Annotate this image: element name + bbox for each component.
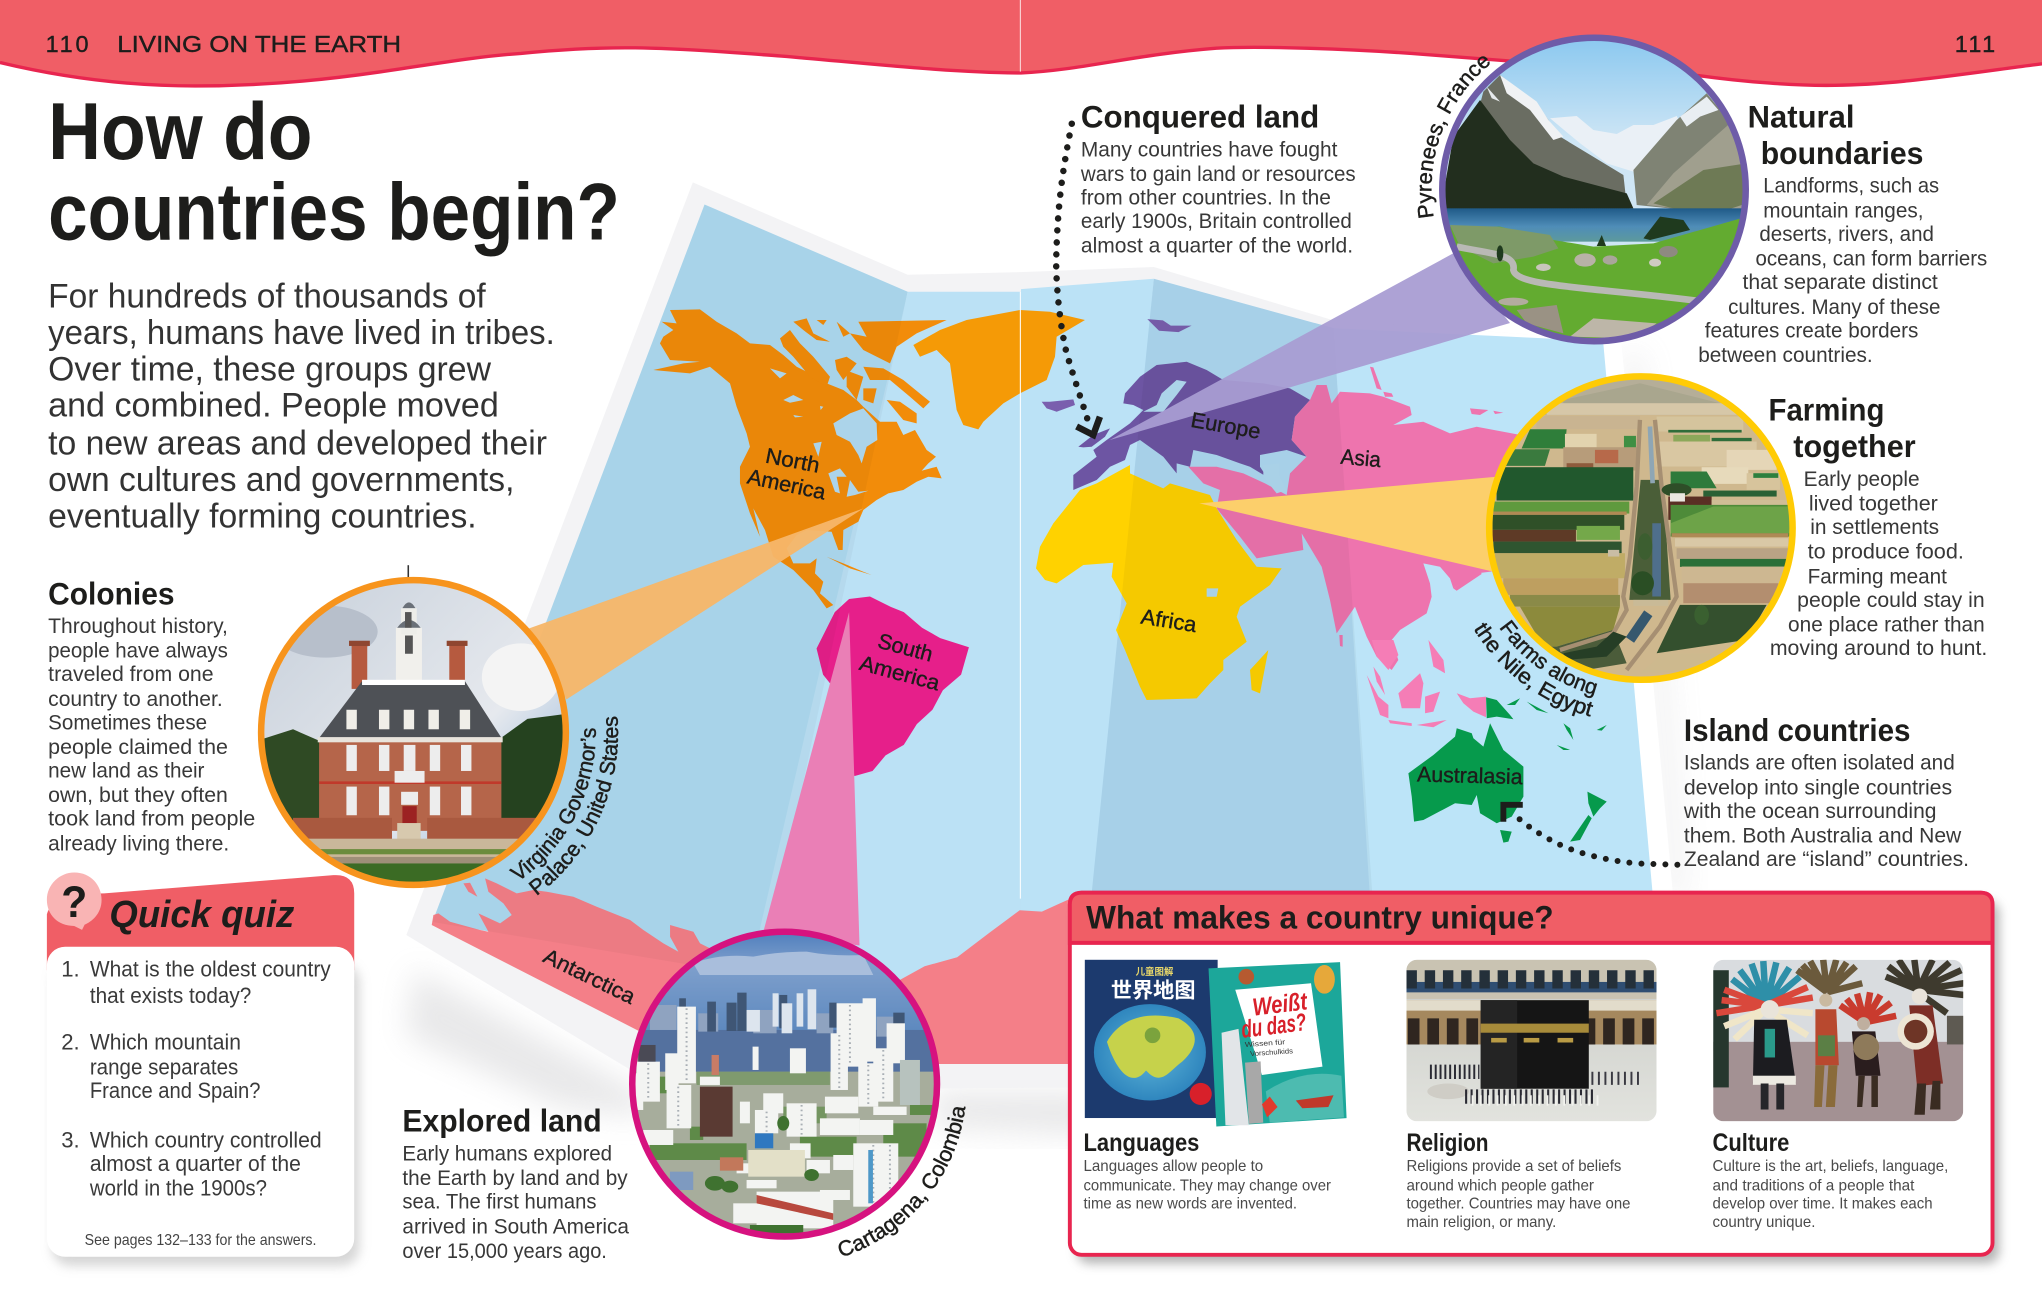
text block: colonies xyxy=(48,576,255,855)
quiz questions xyxy=(61,957,332,1201)
body: conquered land xyxy=(1080,137,1356,258)
arrow: dotted line to Australia xyxy=(1503,805,1677,865)
land texture xyxy=(650,1072,933,1160)
body: island countries: Islands are often isolated and xyxy=(1684,751,1955,775)
body: natural boundaries xyxy=(1698,174,1987,367)
body: island countries xyxy=(1683,751,1969,871)
body: religion: around which people gather xyxy=(1406,1176,1595,1194)
body: natural boundaries: Landforms, such as xyxy=(1763,174,1939,198)
photo: farms along the Nile xyxy=(1480,370,1800,690)
quiz questions: What is the oldest country xyxy=(90,957,332,982)
body: colonies: country to another. xyxy=(48,687,223,711)
Svalbard xyxy=(1147,319,1192,332)
photo ring: purple xyxy=(1442,38,1746,341)
body: colonies: new land as their xyxy=(48,758,204,782)
Baltic sea xyxy=(1143,380,1187,412)
photo ring: magenta xyxy=(632,932,937,1237)
body: farming together: people could stay in xyxy=(1797,588,1985,612)
body: natural boundaries: features create borders xyxy=(1705,318,1918,342)
label: Antarctica: Antarctica xyxy=(540,944,639,1009)
caption: Farms along the Nile: the Nile, Egypt xyxy=(1474,622,1594,717)
body: conquered land: almost a quarter of the world. xyxy=(1081,234,1353,258)
panel body xyxy=(1070,893,1993,1255)
ocean panel: middle fold xyxy=(1074,279,1373,1064)
map paper border xyxy=(406,182,1673,1089)
label: Australasia: Australasia xyxy=(1417,762,1523,789)
label: Europe: Europe xyxy=(1189,408,1262,444)
panel shadow xyxy=(1077,901,1999,1263)
quiz heading: Quick quiz xyxy=(109,894,294,936)
icon: question bubble: ? xyxy=(61,878,87,927)
tower window texture xyxy=(648,1005,890,1203)
body: island countries: develop into single countries xyxy=(1684,775,1952,799)
body: explored land: over 15,000 years ago. xyxy=(402,1239,607,1263)
label: North America: America xyxy=(745,465,828,505)
body: colonies: people have always xyxy=(48,639,228,663)
heading: farming together: together xyxy=(1793,429,1916,464)
continent: Europe xyxy=(1042,362,1310,490)
Madagascar xyxy=(1250,650,1268,693)
title: countries begin? xyxy=(48,168,620,258)
photo ring: yellow xyxy=(1489,376,1793,680)
quiz questions: Which mountain xyxy=(90,1030,241,1055)
intro paragraph: eventually forming countries. xyxy=(48,497,477,535)
text block: explored land xyxy=(402,1104,629,1263)
quiz card shadow xyxy=(52,964,359,1266)
body: island countries: with the ocean surrounding xyxy=(1683,799,1937,823)
photo: Cartagena xyxy=(629,928,940,1240)
body: colonies: took land from people xyxy=(48,807,255,831)
African great lake xyxy=(1207,588,1218,597)
body: conquered land: early 1900s, Britain controlled xyxy=(1081,209,1352,233)
label: Africa: Africa xyxy=(1139,605,1198,637)
book: world atlas: 儿童图解 xyxy=(1136,965,1174,978)
label: South America xyxy=(857,629,942,695)
body: natural boundaries: that separate distinct xyxy=(1742,270,1938,294)
header band xyxy=(0,0,2042,86)
heading: island countries: Island countries xyxy=(1684,713,1910,748)
folded world map xyxy=(406,182,1673,1089)
body: culture: and traditions of a people that xyxy=(1713,1176,1915,1194)
quiz questions: 2. xyxy=(61,1030,80,1055)
continent: Greenland xyxy=(913,310,1085,429)
label: North America xyxy=(745,444,828,505)
book: Weisst du das: Wissen für xyxy=(1245,1038,1286,1049)
body: colonies: already living there. xyxy=(48,831,229,855)
page number 110: 110 xyxy=(46,31,89,57)
heading: farming together xyxy=(1769,393,1916,464)
beam: orange to North America xyxy=(527,508,863,699)
body: island countries: Zealand are “island” countries. xyxy=(1684,847,1969,871)
heading: explored land: Explored land xyxy=(402,1104,602,1139)
body: farming together: in settlements xyxy=(1810,515,1939,539)
continent: Antarctica right xyxy=(899,899,1094,1064)
continent: Africa xyxy=(1036,465,1282,700)
caption: Farms along the Nile xyxy=(1474,578,1598,717)
body: languages: communicate. They may change over xyxy=(1084,1176,1332,1194)
icon: question bubble xyxy=(47,873,102,930)
title: How do xyxy=(48,87,313,177)
body: religion: main religion, or many. xyxy=(1406,1213,1556,1231)
beam: purple to Europe xyxy=(1110,253,1510,440)
continent: North America xyxy=(653,309,947,608)
panel: quick quiz xyxy=(47,873,359,1266)
islands of South East Asia xyxy=(1367,640,1486,727)
body: religion xyxy=(1406,1157,1630,1231)
weather vane spire xyxy=(407,565,409,612)
heading: conquered land: Conquered land xyxy=(1081,100,1319,135)
book: world atlas xyxy=(1085,960,1218,1118)
text block: natural boundaries xyxy=(1698,100,1987,367)
continent: Asia xyxy=(1188,367,1530,670)
continent: Antarctica left xyxy=(432,878,733,1047)
body: farming together: moving around to hunt. xyxy=(1770,636,1987,660)
label: Asia: Asia xyxy=(1340,445,1382,472)
text block: island countries xyxy=(1683,713,1969,871)
body: religion: together. Countries may have one xyxy=(1406,1195,1630,1213)
intro paragraph: For hundreds of thousands of xyxy=(48,277,486,315)
intro paragraph: Over time, these groups grew xyxy=(48,350,491,388)
body: religion: Religions provide a set of beliefs xyxy=(1406,1157,1621,1175)
body: explored land: Early humans explored xyxy=(402,1141,612,1165)
body: explored land: sea. The first humans xyxy=(402,1190,596,1214)
quiz header xyxy=(47,875,354,970)
continent: Australasia xyxy=(1408,697,1607,843)
fold shading xyxy=(432,204,1373,1064)
body: farming together: to produce food. xyxy=(1808,540,1964,564)
book: Weisst du das xyxy=(1209,962,1347,1126)
intro paragraph xyxy=(48,277,555,535)
caption: Cartagena, Colombia: Cartagena, Colombia xyxy=(838,1106,966,1256)
image: Kaaba xyxy=(1406,960,1657,1121)
intro paragraph: to new areas and developed their xyxy=(48,425,547,463)
heading: colonies: Colonies xyxy=(48,576,175,611)
photo: Governor's Palace xyxy=(260,565,568,889)
body: natural boundaries: mountain ranges, xyxy=(1763,198,1923,222)
body: explored land: the Earth by land and by xyxy=(402,1166,628,1190)
intro paragraph: own cultures and governments, xyxy=(48,461,514,499)
panel title: What makes a country unique? xyxy=(1086,900,1554,936)
beam: pink to South America xyxy=(763,612,860,945)
photo: Pyrenees xyxy=(1440,30,1760,350)
canal and banks xyxy=(1629,480,1671,600)
ocean panel: right xyxy=(1334,328,1653,899)
book: world atlas: 世界地图 xyxy=(1111,980,1196,1003)
ocean panel: centre left xyxy=(749,292,1021,1064)
text block: farming together xyxy=(1769,393,1987,660)
continent: South America xyxy=(817,596,969,776)
body: natural boundaries: cultures. Many of these xyxy=(1728,295,1940,319)
body: explored land xyxy=(402,1141,629,1263)
panel: what makes a country unique xyxy=(1070,893,1999,1263)
ocean panel: far left xyxy=(432,204,908,977)
running head: LIVING ON THE EARTH xyxy=(117,31,401,57)
caption: Virginia Governor's Palace: Palace, United States xyxy=(528,716,618,896)
header wave xyxy=(0,0,2042,86)
right fields xyxy=(1657,417,1743,432)
quiz questions: range separates xyxy=(90,1054,238,1079)
heading: culture: Culture xyxy=(1713,1130,1789,1157)
body: farming together: Farming meant xyxy=(1808,564,1947,588)
quiz questions: 1. xyxy=(61,957,80,982)
body: culture: country unique. xyxy=(1713,1213,1815,1231)
body: natural boundaries: between countries. xyxy=(1698,343,1873,367)
body: culture xyxy=(1713,1157,1948,1231)
body: colonies: own, but they often xyxy=(48,783,228,807)
heading: natural boundaries: Natural xyxy=(1748,100,1854,135)
body: natural boundaries: oceans, can form barriers xyxy=(1755,247,1987,271)
body: languages: Languages allow people to xyxy=(1084,1157,1263,1175)
label: South America: America xyxy=(857,651,942,695)
header wave edge xyxy=(0,47,2042,86)
caption: Virginia Governor's Palace: Virginia Governor’s xyxy=(508,728,596,879)
arrow: dotted line to Britain xyxy=(1056,124,1100,435)
label: North America: North xyxy=(763,444,822,478)
heading: languages: Languages xyxy=(1084,1130,1199,1157)
title xyxy=(48,87,620,258)
image: dancers xyxy=(1713,960,1964,1121)
text block: conquered land xyxy=(1080,100,1356,258)
quiz card xyxy=(47,947,354,1257)
book: Weisst du das: Vorschulkids xyxy=(1250,1047,1294,1058)
body: colonies: Throughout history, xyxy=(48,614,228,638)
image: book covers xyxy=(1085,960,1347,1126)
heading: natural boundaries: boundaries xyxy=(1761,136,1923,171)
body: colonies: Sometimes these xyxy=(48,710,207,734)
heading: natural boundaries xyxy=(1748,100,1923,171)
body: farming together: lived together xyxy=(1809,492,1938,516)
body: farming together: Early people xyxy=(1804,467,1920,491)
ocean panel: centre right xyxy=(1021,279,1154,1064)
body: colonies: people claimed the xyxy=(48,735,228,759)
quiz footnote: See pages 132–133 for the answers. xyxy=(85,1231,316,1249)
body: culture: Culture is the art, beliefs, language, xyxy=(1713,1157,1948,1175)
quiz questions: 3. xyxy=(61,1127,80,1152)
body: farming together: one place rather than xyxy=(1788,613,1985,637)
quiz questions: Which country controlled xyxy=(90,1127,322,1152)
book: Weisst du das: Weißt xyxy=(1251,988,1310,1022)
quiz questions: that exists today? xyxy=(90,983,251,1008)
map right white margin xyxy=(1334,320,1673,899)
beam: yellow to Africa xyxy=(1199,477,1498,572)
book: Weisst du das: du das? xyxy=(1240,1009,1308,1044)
quiz questions: world in the 1900s? xyxy=(89,1176,267,1201)
Hudson Bay and lakes xyxy=(770,368,877,497)
body: conquered land: from other countries. In the xyxy=(1081,185,1331,209)
body: culture: develop over time. It makes each xyxy=(1713,1195,1933,1213)
photo ring: orange xyxy=(261,580,566,885)
body: conquered land: Many countries have fought xyxy=(1081,137,1337,161)
heading: farming together: Farming xyxy=(1769,393,1884,428)
intro paragraph: and combined. People moved xyxy=(48,387,499,425)
body: colonies: traveled from one xyxy=(48,662,214,686)
heading: religion: Religion xyxy=(1406,1130,1489,1157)
body: natural boundaries: deserts, rivers, and xyxy=(1759,222,1934,246)
page number 111: 111 xyxy=(1955,31,1995,57)
body: languages: time as new words are invented. xyxy=(1084,1195,1297,1213)
body: languages xyxy=(1084,1157,1332,1213)
quiz questions: France and Spain? xyxy=(90,1078,260,1103)
panel header xyxy=(1070,893,1993,943)
quiz questions: almost a quarter of the xyxy=(90,1151,301,1176)
label: South America: South xyxy=(875,629,935,667)
intro paragraph: years, humans have lived in tribes. xyxy=(48,314,555,352)
body: colonies xyxy=(48,614,255,855)
body: conquered land: wars to gain land or resources xyxy=(1080,162,1356,186)
caption: Pyrenees, France: Pyrenees, France xyxy=(1418,56,1490,218)
body: farming together xyxy=(1770,467,1987,660)
map drop shadow xyxy=(406,352,1688,1136)
body: explored land: arrived in South America xyxy=(402,1214,629,1238)
body: island countries: them. Both Australia and New xyxy=(1684,824,1962,848)
Caspian sea xyxy=(1263,463,1287,493)
caption: Farms along the Nile: Farms along xyxy=(1500,620,1598,698)
